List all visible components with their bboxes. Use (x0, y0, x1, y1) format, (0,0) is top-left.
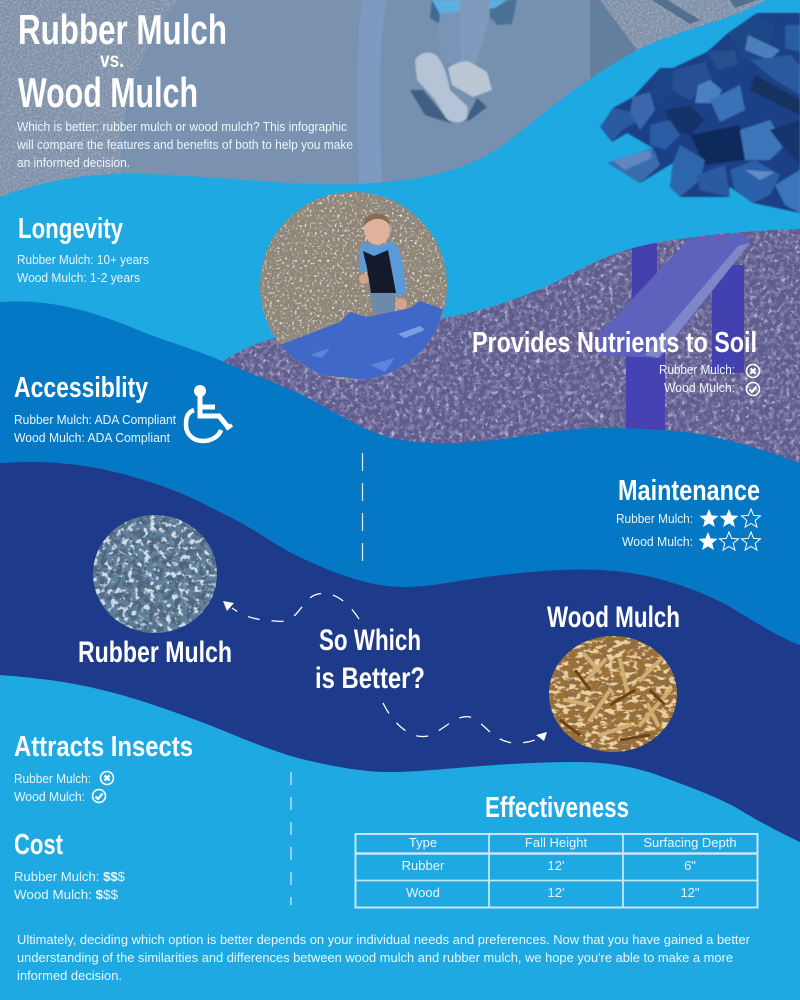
title (18, 6, 227, 116)
panel: effectiveness (355, 792, 758, 908)
panel: longevity (17, 213, 149, 285)
panel: longevity: Longevity (18, 213, 123, 245)
icon: cross (746, 364, 760, 378)
effectiveness table: 6" (684, 858, 696, 873)
title: vs. (100, 49, 124, 72)
panel: accessibility (14, 372, 232, 445)
intro text: an informed decision. (17, 156, 130, 170)
panel: longevity: Wood Mulch: 1-2 years (17, 271, 140, 285)
conclusion text: Ultimately, deciding which option is better depends on your individual needs and preferences. Now that you have gained a better (17, 933, 750, 947)
arrow: to wood mulch (383, 703, 547, 743)
dashed divider (290, 772, 292, 905)
rubber mulch circle photo (90, 512, 220, 636)
panel: provides nutrients to soil: Wood Mulch: (664, 381, 735, 395)
effectiveness table: Fall Height (525, 835, 587, 850)
effectiveness table: Rubber (402, 858, 445, 873)
medium blue wave section (0, 301, 800, 1000)
dark blue wave section (0, 462, 800, 1000)
icon: cross (100, 772, 114, 784)
panel: attracts insects: Wood Mulch: (14, 790, 85, 804)
intro text (16, 120, 353, 170)
panel: cost: Wood Mulch: $$$ (14, 888, 118, 902)
child on mulch circle photo (258, 190, 450, 382)
slide (120, 0, 590, 182)
heading: so which is better (315, 624, 425, 695)
icon: wheelchair (186, 385, 232, 441)
child legs on slide (410, 0, 517, 123)
effectiveness table: Wood (406, 885, 440, 900)
icon: check (92, 790, 106, 802)
icon: wood rating stars (698, 532, 760, 550)
panel: cost: Cost (14, 829, 63, 861)
icon: rubber rating stars (700, 509, 760, 527)
conclusion text (17, 933, 750, 983)
panel: provides nutrients to soil (472, 327, 760, 396)
wood mulch label: Wood Mulch (547, 601, 680, 634)
heading: so which is better: So Which (319, 624, 421, 657)
heading: so which is better: is Better? (315, 662, 425, 695)
panel: maintenance (616, 475, 760, 550)
conclusion text: understanding of the similarities and differences between wood mulch and rubber mulch, we hope you're able to make a more (17, 951, 733, 965)
conclusion text: informed decision. (17, 969, 122, 983)
panel: cost (14, 829, 125, 902)
arrow: to rubber mulch (223, 593, 359, 621)
panel: longevity: Rubber Mulch: 10+ years (17, 253, 149, 267)
panel: maintenance: Rubber Mulch: (616, 512, 693, 526)
effectiveness table: 12' (548, 885, 564, 900)
effectiveness table: Surfacing Depth (643, 835, 737, 850)
panel: accessibility: Accessiblity (14, 372, 148, 404)
wood mulch circle photo (548, 634, 680, 754)
panel: provides nutrients to soil: Rubber Mulch: (659, 363, 735, 377)
effectiveness table: 12' (548, 858, 564, 873)
panel: cost: Rubber Mulch: $$$ (14, 870, 125, 884)
purple mulch playground photo (222, 225, 800, 470)
bottom light blue wave section (0, 675, 800, 1000)
hero photo background (0, 0, 800, 200)
effectiveness table (355, 834, 758, 908)
title: Rubber Mulch (18, 6, 227, 53)
dashed divider (362, 453, 364, 563)
rubber mulch label: Rubber Mulch (78, 636, 232, 669)
panel: accessibility: Wood Mulch: ADA Compliant (14, 431, 171, 445)
effectiveness table: 12" (680, 885, 700, 900)
panel: maintenance: Maintenance (618, 475, 760, 507)
panel: maintenance: Wood Mulch: (622, 535, 693, 549)
panel: attracts insects: Rubber Mulch: (14, 772, 91, 786)
icon: check (746, 382, 760, 396)
intro text: Which is better: rubber mulch or wood mulch? This infographic (17, 120, 347, 134)
panel: attracts insects (14, 731, 193, 804)
panel: accessibility: Rubber Mulch: ADA Compliant (14, 413, 176, 427)
panel: attracts insects: Attracts Insects (14, 731, 193, 763)
panel: effectiveness: Effectiveness (485, 792, 629, 824)
blue plastic rock (280, 301, 443, 380)
child figure (359, 213, 407, 316)
intro text: will compare the features and benefits of both to help you make (16, 138, 353, 152)
playground balance beam (600, 233, 750, 435)
effectiveness table: Type (409, 835, 437, 850)
title: Wood Mulch (18, 69, 198, 116)
rubber mulch pile image (600, 13, 800, 213)
